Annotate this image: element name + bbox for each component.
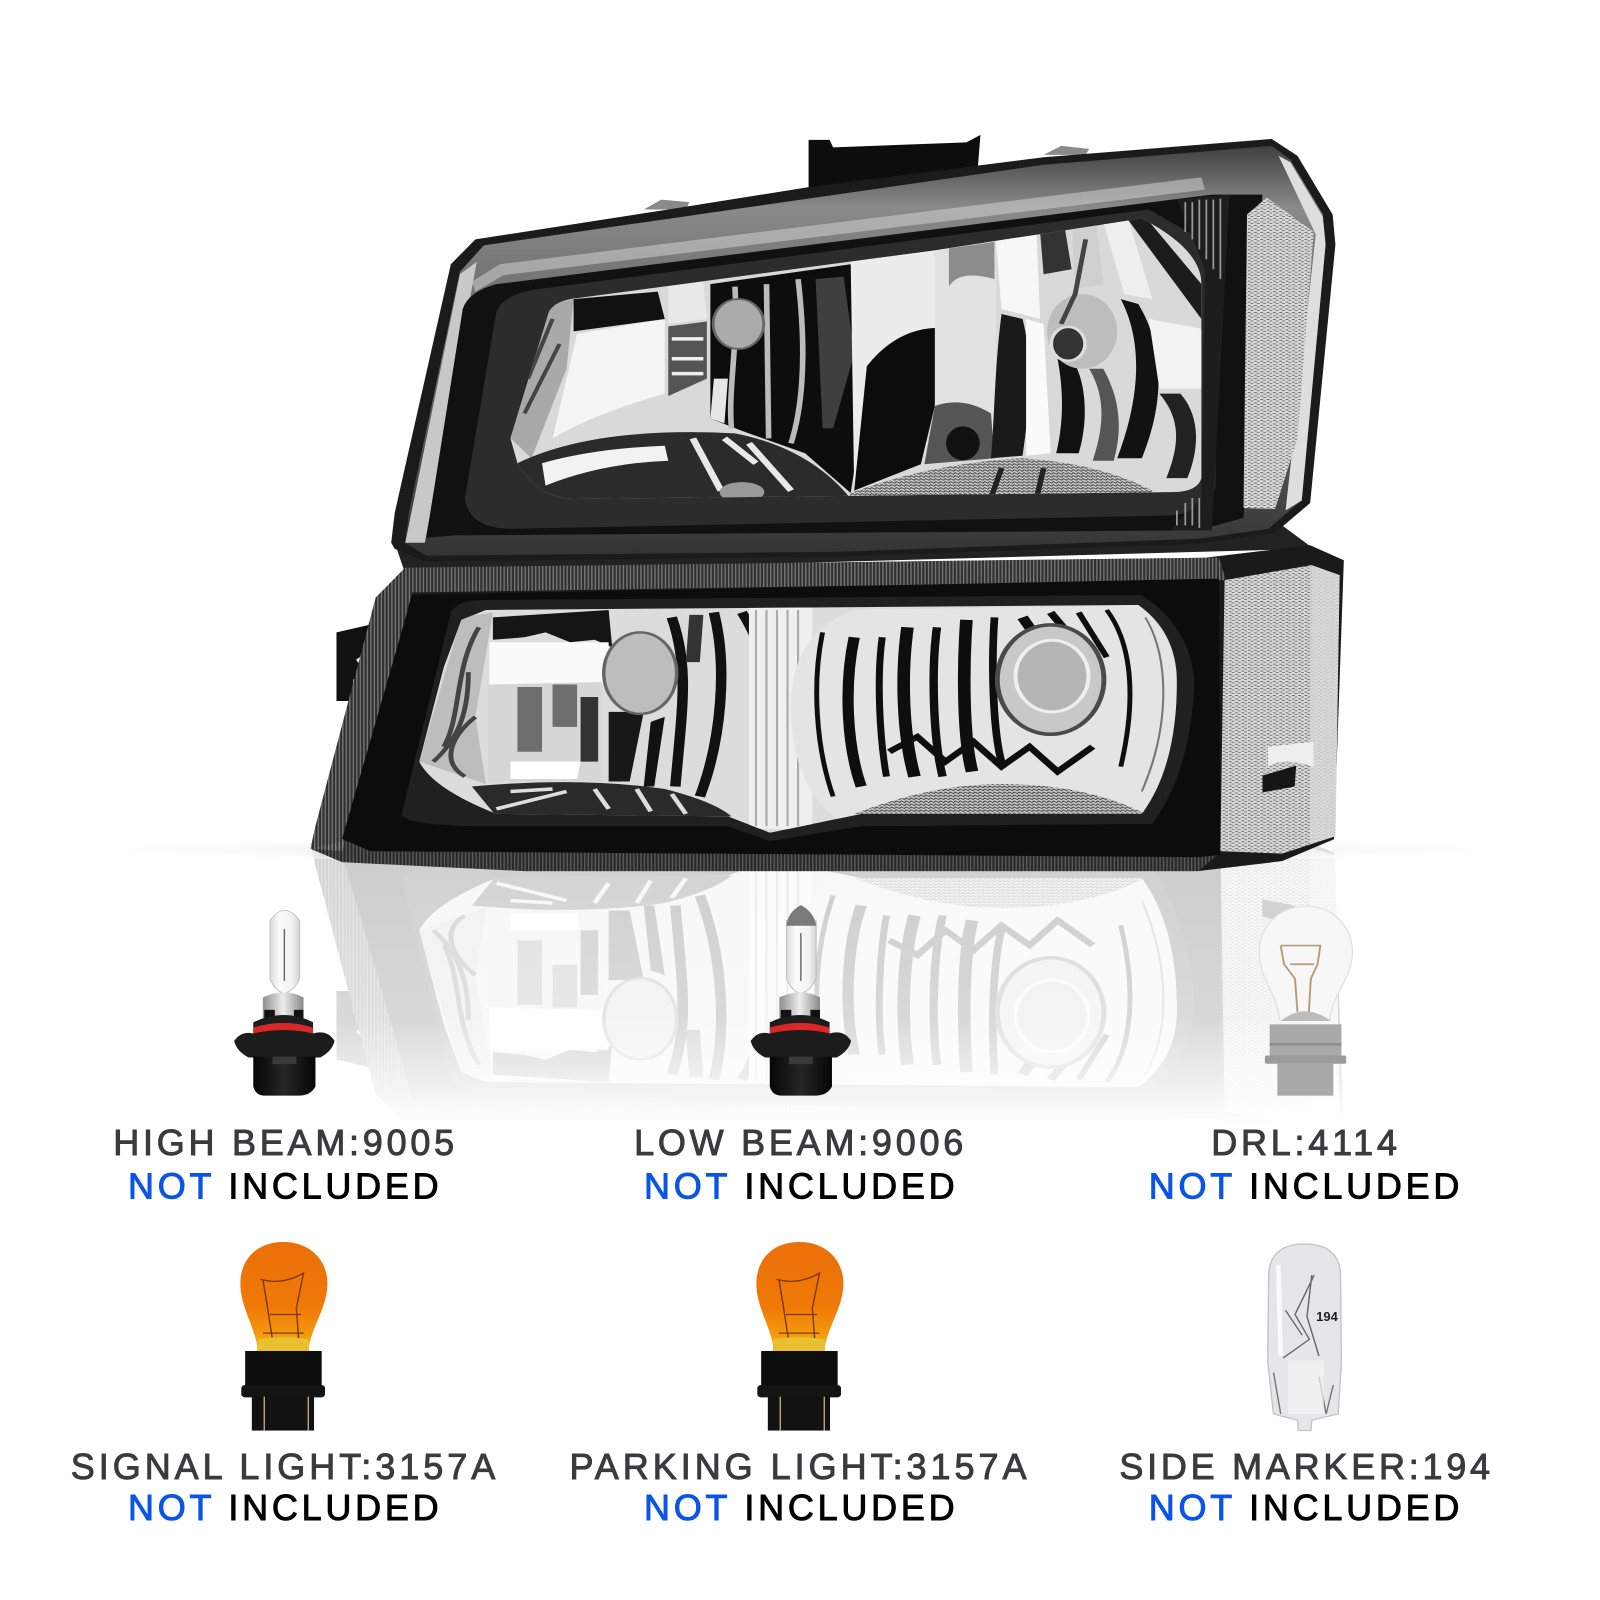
bumper lamp housing — [311, 545, 1344, 871]
black bezel — [426, 195, 1262, 538]
amber side panel — [1244, 198, 1314, 509]
top mounting bracket — [809, 135, 980, 190]
label: side marker — [1119, 1446, 1494, 1528]
rim highlights — [1279, 156, 1326, 510]
lower right arc — [850, 458, 1152, 496]
label: side marker: NOT INCLUDED — [1149, 1487, 1463, 1528]
lower left arc — [518, 432, 848, 499]
label: parking light: NOT INCLUDED — [644, 1487, 958, 1528]
label: DRL: NOT INCLUDED — [1149, 1166, 1463, 1207]
black bezel — [342, 579, 1220, 857]
label: signal light — [71, 1446, 499, 1528]
right reflector stripes — [996, 232, 1040, 319]
mounting tab — [336, 623, 376, 701]
label: low beam — [634, 1122, 967, 1207]
headlamp housing — [391, 139, 1335, 562]
label: low beam: NOT INCLUDED — [644, 1166, 958, 1207]
left bottom trough — [472, 782, 731, 816]
centre bright panel — [851, 250, 935, 491]
bulb socket — [1047, 294, 1117, 369]
vertical fin strip — [1170, 195, 1229, 530]
label: DRL: DRL:4114 — [1211, 1122, 1401, 1163]
seam between the two lamps — [395, 525, 1314, 574]
panel beside dome — [923, 239, 996, 466]
floor reflection of the bumper lamp — [280, 821, 1380, 1152]
right bulb port — [997, 625, 1104, 734]
bulb: side marker 194 — [1268, 1244, 1341, 1431]
label: high beam — [113, 1122, 458, 1207]
bumper signal lamp — [311, 545, 1344, 871]
left reflector — [510, 299, 574, 458]
headlight assembly — [311, 135, 1344, 871]
left chrome bumps — [419, 612, 493, 784]
bulb: DRL 4114 — [1259, 906, 1352, 1096]
bulb: signal light 3157A — [240, 1242, 327, 1431]
right fluted reflector — [791, 605, 1177, 821]
left bulb port — [604, 632, 677, 714]
dark central wedge — [710, 264, 854, 493]
bulb: high beam 9005 — [234, 910, 335, 1096]
floor glow line — [80, 838, 1520, 862]
bumper chrome lens — [412, 598, 1184, 836]
label: signal light: NOT INCLUDED — [128, 1487, 442, 1528]
label: high beam: NOT INCLUDED — [128, 1166, 442, 1207]
label: low beam: LOW BEAM:9006 — [634, 1122, 967, 1163]
main chrome lens — [503, 215, 1212, 508]
central fine ribs — [749, 605, 812, 829]
small clips — [644, 146, 1089, 210]
left port — [713, 299, 764, 349]
label: high beam: HIGH BEAM:9005 — [113, 1122, 458, 1163]
main headlamp — [391, 135, 1335, 562]
label: signal light: SIGNAL LIGHT:3157A — [71, 1446, 499, 1487]
bulb: low beam 9006 — [751, 905, 851, 1096]
label: DRL — [1149, 1122, 1463, 1207]
central dark dome — [854, 328, 937, 491]
stepped dark blocks — [493, 610, 612, 647]
clear side marker panel — [1220, 565, 1340, 854]
clear lens rim — [405, 146, 1326, 556]
label: side marker: SIDE MARKER:194 — [1119, 1446, 1494, 1487]
bulb: parking light 3157A — [756, 1242, 843, 1431]
right bottom trough — [854, 784, 1145, 814]
mid stripes — [609, 712, 644, 782]
small bulb number: 194 — [1316, 1309, 1339, 1324]
label: parking light — [569, 1446, 1031, 1528]
label: parking light: PARKING LIGHT:3157A — [569, 1446, 1031, 1487]
